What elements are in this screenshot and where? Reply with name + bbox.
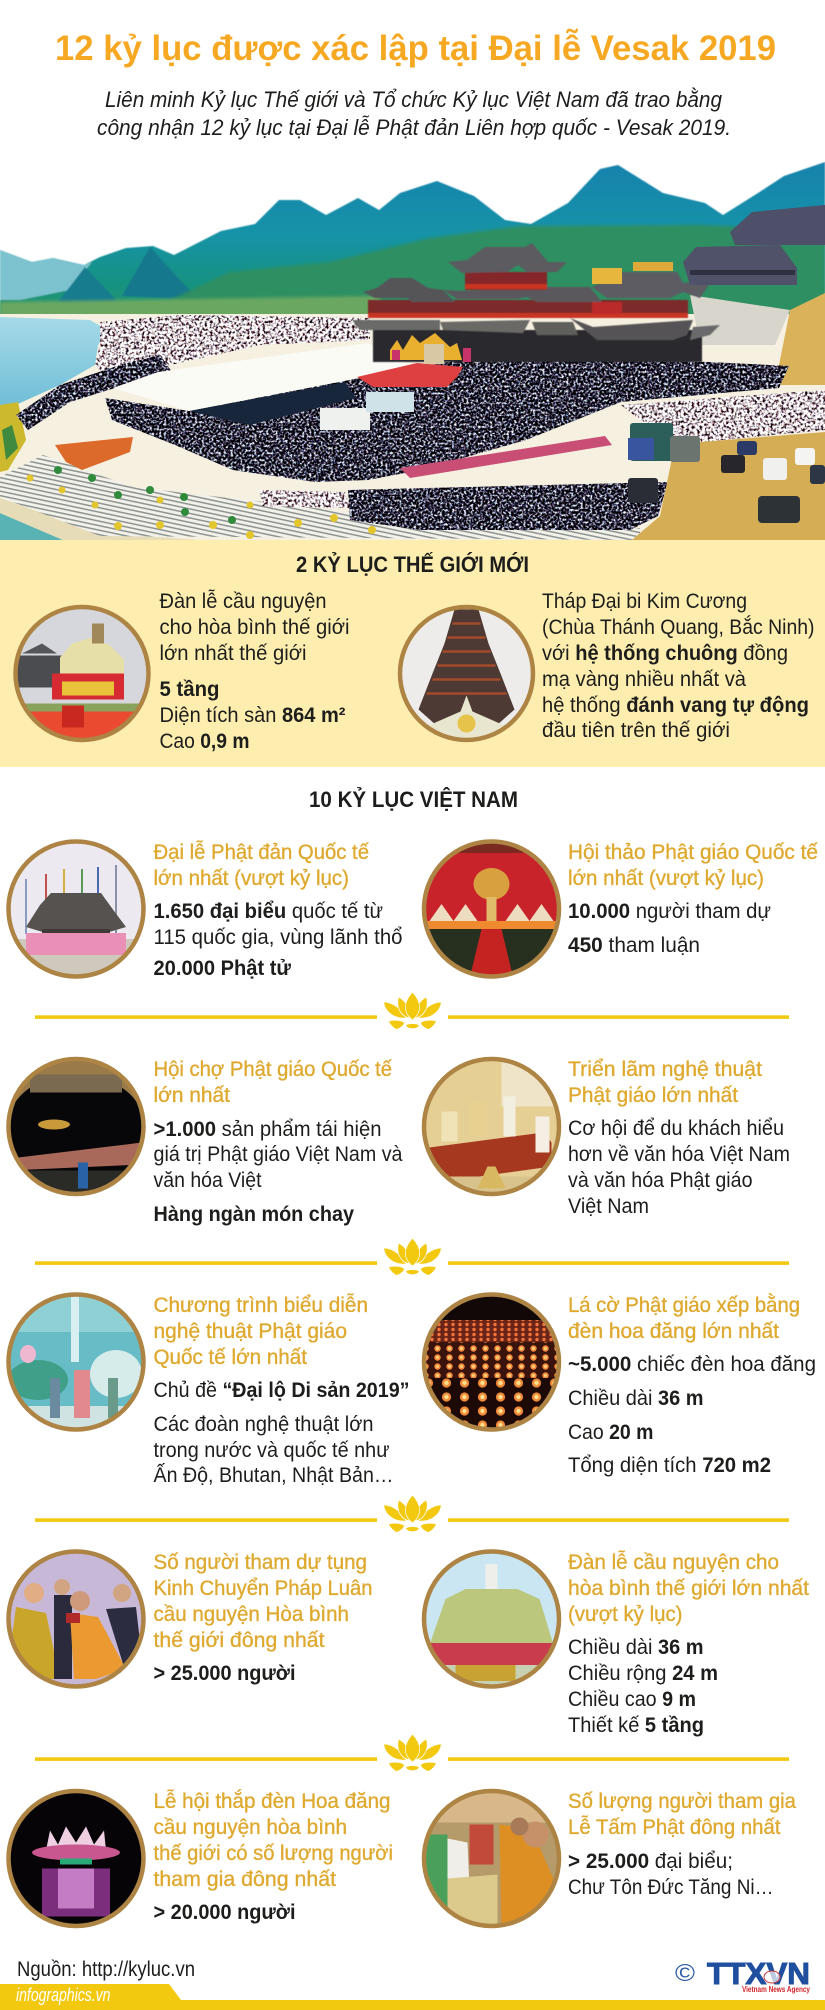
record: international conference — [422, 839, 818, 979]
text: peace altar exceeded: Chiều cao 9 m — [568, 1688, 696, 1711]
text: peace altar exceeded — [568, 1551, 809, 1737]
temple top section — [465, 272, 547, 290]
broadcast trucks — [320, 408, 370, 430]
temple red band — [368, 300, 688, 318]
text: peace altar exceeded: Đàn lễ cầu nguyện cho — [568, 1551, 779, 1574]
photo: night fair — [6, 1056, 146, 1196]
text: peace altar exceeded: hòa bình thế giới lớn nhất — [568, 1577, 809, 1600]
text: performing arts: Quốc tế lớn nhất — [154, 1346, 307, 1369]
small group on plaza — [260, 490, 350, 508]
photo: monks chanting — [6, 1549, 146, 1689]
text: sutra chanting: Kinh Chuyển Pháp Luân — [154, 1577, 372, 1600]
temple — [352, 243, 720, 362]
heading: 10 Vietnam records: 10 KỶ LỤC VIỆT NAM — [309, 787, 518, 812]
heading: 2 world records: 2 KỶ LỤC THẾ GIỚI MỚI — [296, 552, 529, 577]
text: Buddha bathing: Chư Tôn Đức Tăng Ni… — [568, 1876, 774, 1899]
text: art exhibition: Phật giáo lớn nhất — [568, 1084, 738, 1107]
photo: Buddha bathing ceremony — [422, 1788, 562, 1928]
text: sutra chanting: thế giới đông nhất — [154, 1629, 325, 1652]
intro text — [97, 87, 731, 140]
text: world peace altar: Đàn lễ cầu nguyện — [160, 590, 326, 613]
tan slope — [775, 293, 825, 385]
text: peace altar exceeded: Thiết kế 5 tầng — [568, 1714, 704, 1737]
orange-robed group — [55, 437, 133, 470]
record: lantern flag — [422, 1292, 816, 1477]
temple middle roofs — [363, 278, 455, 302]
text: lantern festival: Lễ hội thắp đèn Hoa đăng — [154, 1790, 390, 1813]
divider with lotus — [35, 1734, 789, 1771]
agency tagline: Vietnam News Agency — [742, 1985, 810, 1994]
text: world peace altar: cho hòa bình thế giới — [160, 616, 350, 639]
vehicles — [628, 423, 825, 523]
steps — [0, 455, 640, 540]
text: performing arts: Chương trình biểu diễn — [154, 1294, 368, 1317]
text: sutra chanting — [154, 1551, 372, 1685]
text: lantern festival: cầu nguyện hòa bình — [154, 1816, 347, 1839]
text: sutra chanting: Số người tham dự tụng — [154, 1551, 367, 1574]
intro text: Liên minh Kỷ lục Thế giới và Tổ chức Kỷ lục Việt Nam đã trao bằng — [105, 87, 722, 112]
temple lower roofs — [440, 320, 530, 333]
outer crowd arc — [16, 355, 172, 430]
text: Buddhist fair: lớn nhất — [154, 1084, 230, 1107]
text: lantern flag: Lá cờ Phật giáo xếp bằng — [568, 1294, 800, 1317]
text: international conference — [568, 841, 818, 957]
lower crowd — [348, 482, 668, 530]
divider with lotus — [35, 992, 789, 1029]
record: peace altar exceeded — [422, 1549, 809, 1737]
text: international Vesak: 1.650 đại biểu quốc tế từ — [154, 900, 383, 923]
lake — [0, 317, 108, 412]
photo: lantern field — [422, 1292, 562, 1432]
text: international Vesak: lớn nhất (vượt kỷ lục) — [154, 867, 349, 890]
mountains — [0, 162, 825, 340]
text: lantern flag: Chiều dài 36 m — [568, 1387, 704, 1410]
text: art exhibition: Cơ hội để du khách hiểu — [568, 1117, 784, 1140]
divider with lotus — [35, 1238, 789, 1275]
photo: conference hall — [422, 839, 562, 979]
text: art exhibition: và văn hóa Phật giáo — [568, 1169, 752, 1192]
text: Buddhist fair: văn hóa Việt — [154, 1169, 262, 1192]
record: performing arts — [6, 1292, 410, 1487]
photo: world peace altar — [12, 604, 152, 744]
text: performing arts: Chủ đề “Đại lộ Di sản 2019” — [154, 1379, 410, 1402]
text: lantern festival: thế giới có số lượng người — [154, 1842, 393, 1865]
record: art exhibition — [422, 1056, 790, 1218]
text: lantern flag: Tổng diện tích 720 m2 — [568, 1454, 771, 1477]
footer brand: infographics.vn — [16, 1985, 110, 2005]
rear right halls — [683, 245, 797, 285]
text: performing arts: Ấn Độ, Bhutan, Nhật Bản… — [154, 1464, 394, 1487]
copyright mark: © — [675, 1960, 695, 1987]
text: peace altar exceeded: (vượt kỷ lục) — [568, 1603, 682, 1626]
text: lantern festival: tham gia đông nhất — [154, 1868, 336, 1891]
text: performing arts: trong nước và quốc tế như — [154, 1439, 390, 1462]
text: art exhibition: Triển lãm nghệ thuật — [568, 1058, 762, 1081]
text: Buddha bathing: > 25.000 đại biểu; — [568, 1850, 733, 1873]
text: lantern festival — [154, 1790, 393, 1924]
lower procession — [400, 436, 612, 478]
photo: stage performance — [6, 1292, 146, 1432]
text: international conference: lớn nhất (vượt kỷ lục) — [568, 867, 764, 890]
divider with lotus — [35, 1495, 789, 1532]
main crowd — [105, 358, 789, 482]
photo: temple with flags — [6, 839, 146, 979]
far parking area — [95, 315, 370, 375]
logo: TTXVN — [675, 1957, 810, 1994]
text: lantern festival: > 20.000 người — [154, 1901, 296, 1924]
title: 12 kỷ lục được xác lập tại Đại lễ Vesak 2019 — [55, 28, 776, 68]
footer band — [0, 1984, 825, 2010]
text: Kim Cuong tower: hệ thống đánh vang tự động — [542, 694, 809, 717]
photo: Kim Cuong tower — [396, 604, 536, 744]
text: sutra chanting: > 25.000 người — [154, 1662, 296, 1685]
text: international Vesak: 115 quốc gia, vùng lãnh thổ — [154, 926, 402, 949]
text: international Vesak: 20.000 Phật tử — [154, 957, 292, 980]
text: art exhibition — [568, 1058, 790, 1218]
agency wordmark: TTXVN — [707, 1957, 810, 1991]
globe swoosh — [764, 1971, 780, 1983]
text: Buddhist fair — [154, 1058, 403, 1226]
photo: exhibition altar — [422, 1056, 562, 1196]
text: peace altar exceeded: Chiều rộng 24 m — [568, 1662, 718, 1685]
flower strip — [0, 402, 26, 472]
text: performing arts: Các đoàn nghệ thuật lớn — [154, 1413, 374, 1436]
green foothills — [170, 225, 825, 340]
yellow rear roofs — [592, 268, 622, 284]
text: Kim Cuong tower — [542, 590, 814, 742]
text: sutra chanting: cầu nguyện Hòa bình — [154, 1603, 349, 1626]
text: Buddha bathing: Lễ Tấm Phật đông nhất — [568, 1816, 781, 1839]
text: art exhibition: Việt Nam — [568, 1195, 649, 1218]
text: lantern flag: Cao 20 m — [568, 1421, 654, 1444]
right plaza people — [621, 390, 825, 445]
step flowers — [26, 466, 376, 539]
record: Buddhist fair — [6, 1056, 403, 1226]
text: peace altar exceeded: Chiều dài 36 m — [568, 1636, 704, 1659]
photo: lotus lantern at night — [6, 1788, 146, 1928]
ground — [0, 314, 825, 540]
temple piers — [373, 330, 702, 362]
text: international conference: 450 tham luận — [568, 934, 700, 957]
text: Buddhist fair: Hàng ngàn món chay — [154, 1203, 354, 1226]
sand bank — [0, 498, 200, 540]
text: world peace altar: 5 tầng — [160, 678, 220, 701]
photo: tiered altar — [422, 1549, 562, 1689]
text: Kim Cuong tower: với hệ thống chuông đồng — [542, 642, 788, 665]
text: international conference: 10.000 người tham dự — [568, 900, 771, 923]
text: lantern flag: ~5.000 chiếc đèn hoa đăng — [568, 1353, 816, 1376]
white tent — [113, 343, 416, 411]
text: Buddhist fair: giá trị Phật giáo Việt Nam và — [154, 1143, 403, 1166]
text: Buddhist fair: Hội chợ Phật giáo Quốc tế — [154, 1058, 392, 1081]
text: lantern flag: đèn hoa đăng lớn nhất — [568, 1320, 779, 1343]
record: Buddha bathing — [422, 1788, 796, 1928]
lower-left water — [0, 513, 63, 540]
source line: Nguồn: http://kyluc.vn — [17, 1958, 195, 1981]
text: world peace altar — [160, 590, 350, 753]
temple stage arches — [390, 333, 462, 360]
text: international Vesak: Đại lễ Phật đản Quốc tế — [154, 841, 369, 864]
record: sutra chanting — [6, 1549, 372, 1689]
record: international Vesak — [6, 839, 402, 980]
text: art exhibition: hơn về văn hóa Việt Nam — [568, 1143, 790, 1166]
text: lantern flag — [568, 1294, 816, 1477]
record: lantern festival — [6, 1788, 393, 1928]
tent shadow — [189, 382, 356, 425]
text: world peace altar: lớn nhất thế giới — [160, 642, 306, 665]
text: performing arts: nghệ thuật Phật giáo — [154, 1320, 347, 1343]
text: Buddha bathing — [568, 1790, 796, 1899]
text: Kim Cuong tower: mạ vàng nhiều nhất và — [542, 668, 746, 691]
text: Kim Cuong tower: đầu tiên trên thế giới — [542, 719, 730, 742]
text: Buddha bathing: Số lượng người tham gia — [568, 1790, 796, 1813]
yellow dirt lot — [632, 432, 825, 540]
stage carpet — [357, 363, 463, 387]
text: world peace altar: Diện tích sàn 864 m² — [160, 704, 346, 727]
text: Kim Cuong tower: Tháp Đại bi Kim Cương — [542, 590, 747, 613]
text: world peace altar: Cao 0,9 m — [160, 730, 250, 753]
text: performing arts — [154, 1294, 410, 1487]
text: international Vesak — [154, 841, 402, 980]
hero photo: aerial view of Vesak venue — [0, 162, 825, 540]
text: international conference: Hội thảo Phật giáo Quốc tế — [568, 841, 818, 864]
text: Buddhist fair: >1.000 sản phẩm tái hiện — [154, 1118, 382, 1141]
panel: 2 world records — [0, 540, 825, 767]
intro text: công nhận 12 kỷ lục tại Đại lễ Phật đản Liên hợp quốc - Vesak 2019. — [97, 115, 731, 140]
